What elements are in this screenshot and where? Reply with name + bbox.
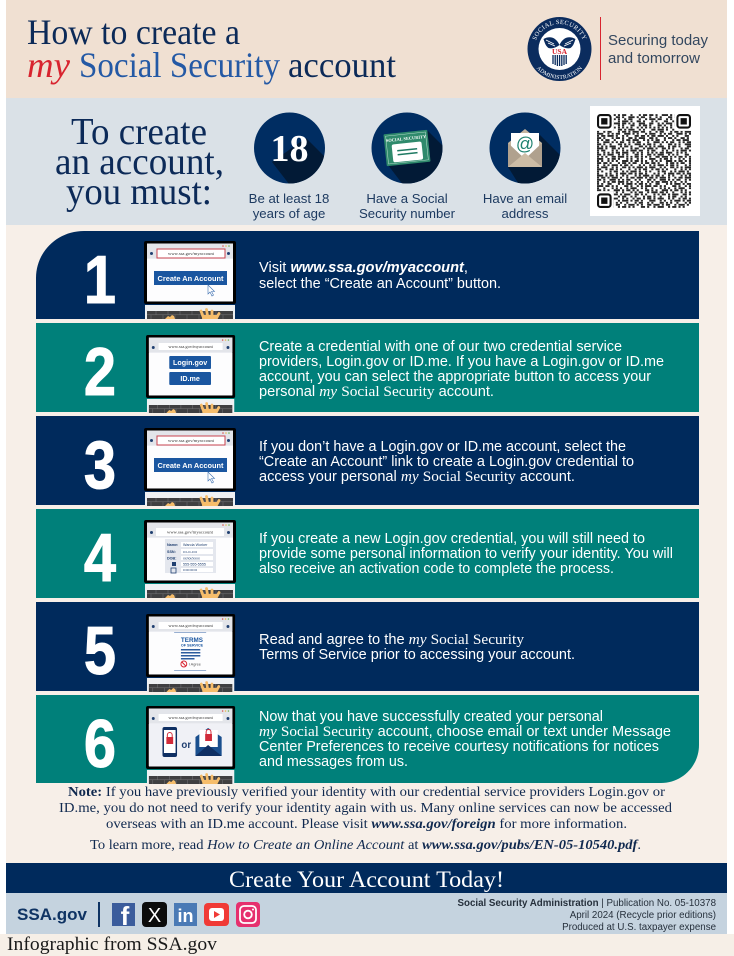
laptop: credential providers [146, 335, 235, 413]
banner: create your account today: Create Your Account Today! [229, 867, 504, 892]
publication info [458, 898, 716, 933]
label: email: Have an email [483, 191, 567, 206]
text: step 2: Create a credential with one of our two credential service [259, 339, 622, 355]
step 1 [36, 231, 699, 319]
divider line [600, 17, 601, 80]
divider [98, 902, 100, 927]
title [27, 12, 396, 85]
QR code [590, 106, 700, 216]
step 2: 2 [84, 335, 116, 410]
icon: email envelope: @ [516, 134, 534, 154]
label: social security number: Have a Social [366, 191, 448, 206]
logo: SSA seal: SOCIAL SECURITY [532, 20, 587, 40]
step 5 [36, 602, 699, 692]
publication info: April 2024 (Recycle prior editions) [570, 910, 716, 921]
page background [6, 225, 727, 865]
publication info: Produced at U.S. taxpayer expense [562, 922, 716, 933]
icon: facebook: f [121, 901, 130, 931]
note text: overseas with an ID.me account. Please visit www.ssa.gov/foreign for more information. [106, 816, 627, 831]
text: step 4: provide some personal information to verify your identity. You will [259, 546, 673, 562]
source strip [0, 934, 734, 956]
icon: email envelope [490, 112, 560, 184]
laptop: identity form: DOB: [167, 556, 176, 560]
laptop: identity form: Wanda Worker [183, 543, 208, 547]
publication info: Social Security Administration | Publication No. 05-10378 [458, 898, 716, 909]
label: social security number: Security number [359, 206, 456, 221]
laptop: create an account link: www.ssa.gov/myaccount [168, 438, 215, 443]
text: step 2: providers, Login.gov or ID.me. If you have a Login.gov or ID.me [259, 354, 664, 370]
laptop: terms of service: www.ssa.gov/myaccount [168, 623, 214, 628]
footer band [6, 893, 727, 934]
banner: create your account today [6, 863, 727, 893]
text: step 1: select the “Create an Account” button. [259, 276, 501, 292]
SSA.gov link: SSA.gov [17, 905, 88, 924]
text: step 3: If you don’t have a Login.gov or ID.me account, select the [259, 439, 626, 455]
heading: to create an account: you must: [66, 171, 212, 213]
source strip: Infographic from SSA.gov [7, 934, 218, 955]
icon: linkedin: in [178, 906, 194, 926]
tagline: and tomorrow [608, 51, 701, 67]
laptop: identity form: 555-555-5555 [183, 562, 206, 566]
label: age [249, 191, 329, 221]
header band [6, 0, 727, 98]
text: step 4: also receive an activation code to complete the process. [259, 561, 614, 577]
text: step 2: personal my Social Security account. [259, 384, 494, 400]
text: step 3 [259, 439, 634, 485]
logo: SSA seal: ADMINISTRATION [536, 66, 582, 79]
text: step 3: access your personal my Social Security account. [259, 469, 575, 485]
title: How to create a [27, 12, 240, 52]
text: step 6: Now that you have successfully created your personal [259, 709, 603, 725]
text: step 2 [259, 339, 664, 400]
icon: age 18: 18 [270, 128, 308, 170]
label: age: years of age [253, 206, 325, 221]
laptop: create an account: Create An Account [158, 274, 224, 283]
laptop: create an account: www.ssa.gov/myaccount [168, 251, 215, 256]
note text: ID.me, you do not need to verify your identity again with us. Many online services can now be accessed [59, 800, 672, 815]
laptop: phone or email notification: or [181, 740, 191, 751]
text: step 6: Center Preferences to receive courtesy notifications for notices [259, 739, 659, 755]
laptop: identity form: www.ssa.gov/myaccount [167, 530, 214, 535]
tagline: Securing today [608, 33, 709, 49]
label: social security number [359, 191, 456, 221]
laptop: phone or email notification: www.ssa.gov/myaccount [168, 715, 214, 720]
text: step 1: Visit www.ssa.gov/myaccount , [259, 260, 468, 276]
laptop: identity form: xx/xx/xxxx [183, 556, 200, 560]
laptop: terms of service: I Agree [189, 661, 202, 667]
step 6 [36, 695, 699, 784]
label: age: Be at least 18 [249, 191, 329, 206]
laptop: phone or email notification [146, 706, 235, 784]
laptop: credential providers: Login.gov [173, 358, 208, 367]
icon: X [142, 902, 167, 927]
heading: to create an account [55, 111, 224, 213]
text: step 4: If you create a new Login.gov credential, you will still need to [259, 531, 645, 547]
heading: to create an account: an account, [55, 141, 224, 183]
laptop: create an account [144, 241, 236, 319]
icon: youtube [204, 903, 229, 926]
text: step 6: my Social Security account, choose email or text under Message [259, 724, 671, 740]
requirements band [6, 98, 727, 225]
label: email [483, 191, 567, 221]
laptop: credential providers: ID.me [180, 374, 200, 383]
text: step 2: account, you can select the appropriate button to access your [259, 369, 651, 385]
icon: social security card: SOCIAL SECURITY [386, 134, 427, 143]
laptop: identity form: ••••••••••• [183, 568, 198, 572]
title: Social Security [79, 45, 280, 85]
laptop: identity form: •••-••-•••• [183, 550, 198, 554]
logo: SSA seal: USA [552, 47, 568, 56]
heading: to create an account: To create [71, 111, 207, 153]
icon: social security card [372, 112, 442, 184]
icon: X: X [148, 905, 161, 927]
note text [59, 784, 672, 852]
step 5: 5 [84, 614, 116, 689]
step 1: 1 [84, 243, 116, 318]
text: step 6 [259, 709, 671, 770]
icon: instagram [236, 902, 260, 927]
laptop: terms of service [146, 614, 235, 692]
laptop: identity form: Name: [167, 543, 178, 547]
tagline [608, 33, 709, 67]
title: account [288, 45, 396, 85]
label: email: address [502, 206, 549, 221]
laptop: create an account link [144, 428, 236, 506]
step 3: 3 [84, 428, 116, 503]
step 6: 6 [84, 707, 116, 782]
step 4: 4 [84, 521, 116, 596]
text: step 5: Terms of Service prior to accessing your account. [259, 647, 575, 663]
laptop: identity form: SSN: [167, 550, 176, 554]
text: step 3: “Create an Account” link to create a Login.gov credential to [259, 454, 634, 470]
laptop: terms of service: OF SERVICE [181, 643, 204, 648]
logo: SSA seal [528, 17, 592, 81]
text: step 5 [259, 632, 575, 663]
note text: Note: If you have previously verified your identity with our credential service providers Login.gov or [68, 784, 666, 799]
icon: age 18 [254, 112, 325, 184]
title: my [27, 45, 70, 85]
laptop: credential providers: www.ssa.gov/myaccount [168, 344, 214, 349]
text: step 1 [259, 260, 501, 292]
step 3 [36, 416, 699, 506]
step 4 [36, 509, 699, 598]
step 2 [36, 323, 699, 413]
text: step 5: Read and agree to the my Social Security [259, 632, 525, 648]
laptop: terms of service: TERMS [181, 637, 204, 644]
laptop: create an account link: Create An Account [158, 461, 224, 470]
icon: linkedin [174, 903, 197, 926]
icon: facebook [112, 901, 135, 931]
note text: To learn more, read How to Create an Online Account at www.ssa.gov/pubs/EN-05-10540.pdf . [90, 837, 641, 852]
text: step 4 [259, 531, 673, 577]
laptop: identity form [144, 520, 236, 598]
text: step 6: and messages from us. [259, 754, 408, 770]
